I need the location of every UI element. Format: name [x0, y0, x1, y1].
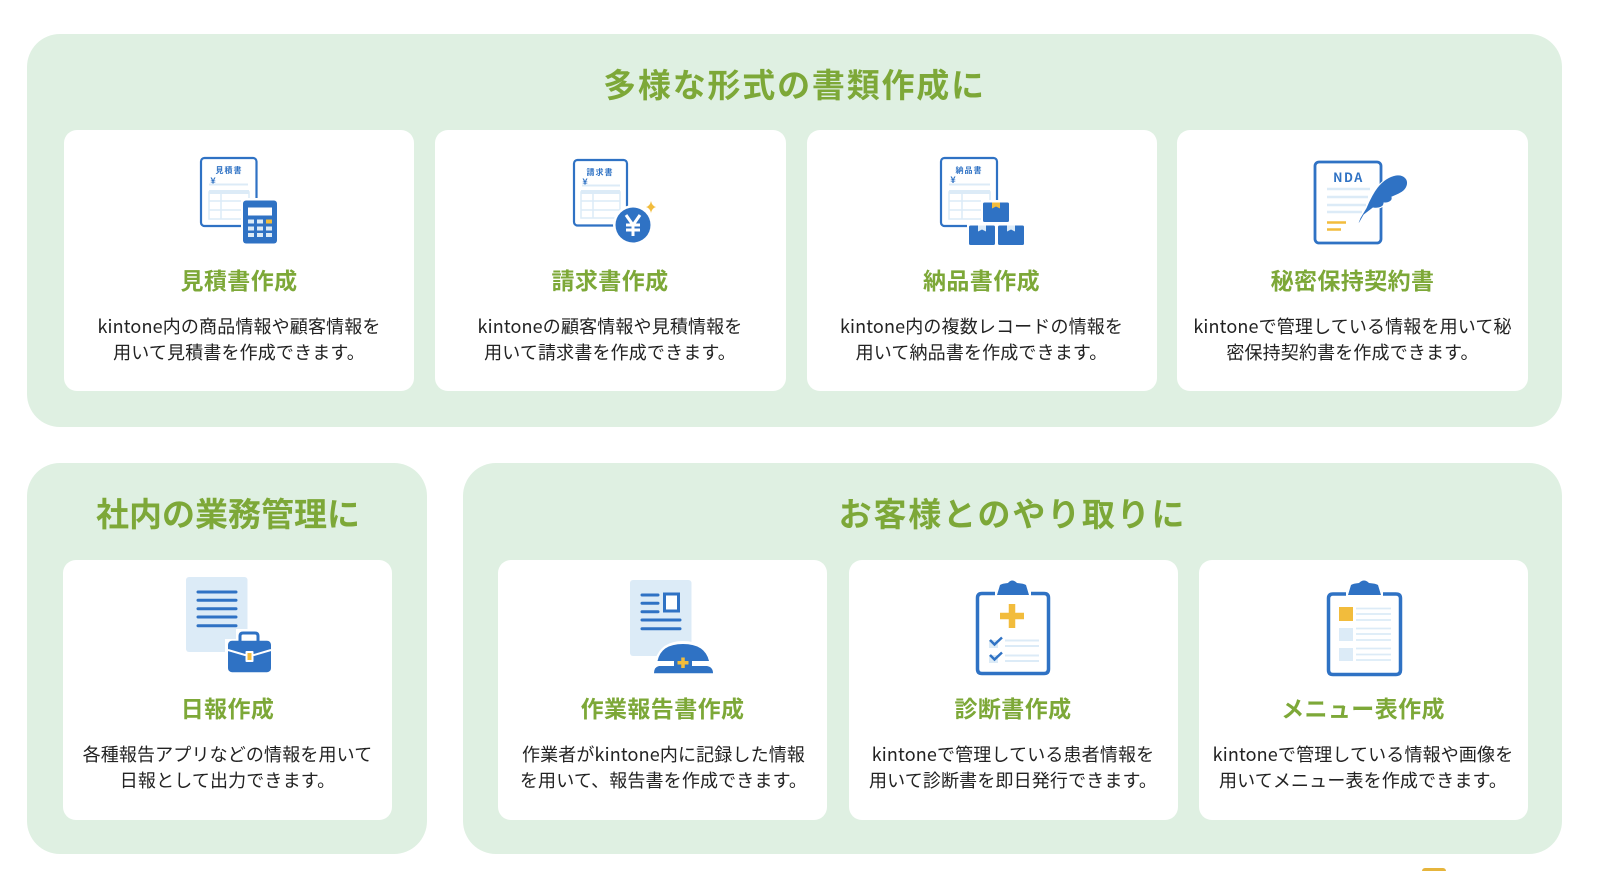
description: work report — [520, 740, 807, 792]
icon: NDA with quill: NDA — [1333, 167, 1364, 186]
card title: invoice: 請求書作成 — [552, 262, 668, 296]
description: invoice — [478, 312, 742, 365]
description: daily report — [83, 740, 372, 792]
icon: clipboard with cross — [976, 580, 1050, 676]
description: daily report: 各種報告アプリなどの情報を用いて — [83, 740, 372, 766]
panel: internal operations — [27, 463, 427, 854]
description: NDA: kintoneで管理している情報を用いて秘 — [1193, 312, 1512, 338]
description: delivery note: kintone内の複数レコードの情報を — [840, 312, 1123, 338]
description: quotation: kintone内の商品情報や顧客情報を — [97, 312, 381, 338]
cropped yellow shape at bottom edge — [1422, 868, 1446, 871]
card: invoice — [434, 130, 786, 391]
panel: document creation — [27, 34, 1562, 427]
icon: NDA with quill — [1314, 160, 1408, 244]
icon: invoice with yen coin: ¥ — [582, 175, 588, 188]
icon: quotation with calculator: 見積書 — [216, 165, 242, 176]
icon: clipboard with menu list — [1326, 580, 1402, 676]
card title: medical certificate: 診断書作成 — [954, 690, 1072, 724]
card title: NDA: 秘密保持契約書 — [1271, 262, 1434, 296]
icon: quotation with calculator: ¥ — [210, 174, 216, 187]
description: invoice: 用いて請求書を作成できます。 — [484, 339, 736, 365]
card: work report — [498, 560, 827, 820]
icon: delivery note with boxes: ¥ — [950, 173, 956, 186]
card title: daily report: 日報作成 — [181, 690, 274, 724]
description: delivery note — [840, 312, 1123, 365]
card: NDA — [1177, 130, 1528, 391]
description: medical certificate: 用いて診断書を即日発行できます。 — [869, 766, 1157, 792]
description: invoice: kintoneの顧客情報や見積情報を — [478, 312, 742, 338]
panel: customer interactions — [463, 463, 1562, 854]
description: quotation: 用いて見積書を作成できます。 — [113, 339, 365, 365]
description: NDA: 密保持契約書を作成できます。 — [1226, 339, 1479, 365]
card: menu — [1198, 560, 1528, 820]
card: medical certificate — [848, 560, 1178, 820]
description: quotation — [97, 312, 381, 365]
description: work report: 作業者がkintone内に記録した情報 — [522, 740, 805, 766]
card: delivery note — [806, 130, 1156, 391]
card: quotation — [64, 130, 414, 391]
icon: report with helmet — [630, 580, 713, 674]
heading: document creation: 多様な形式の書類作成に — [603, 59, 986, 107]
card title: menu: メニュー表作成 — [1281, 690, 1445, 724]
description: NDA — [1193, 312, 1512, 365]
icon: delivery note with boxes: 納品書 — [956, 165, 982, 176]
description: daily report: 日報として出力できます。 — [120, 766, 335, 792]
card title: delivery note: 納品書作成 — [923, 262, 1040, 296]
icon: invoice with yen coin — [572, 158, 656, 242]
card title: quotation: 見積書作成 — [180, 262, 298, 296]
description: menu: kintoneで管理している情報や画像を — [1213, 740, 1513, 766]
description: medical certificate: kintoneで管理している患者情報を — [872, 740, 1154, 766]
card title: work report: 作業報告書作成 — [581, 690, 744, 724]
card: daily report — [63, 560, 392, 820]
icon: quotation with calculator — [200, 156, 277, 244]
icon: invoice with yen coin: 請求書 — [586, 167, 614, 178]
icon: report with briefcase — [186, 577, 271, 672]
heading: customer interactions: お客様とのやり取りに — [839, 488, 1186, 536]
description: work report: を用いて、報告書を作成できます。 — [520, 766, 807, 792]
description: menu — [1213, 740, 1513, 792]
description: menu: 用いてメニュー表を作成できます。 — [1219, 766, 1507, 792]
icon: delivery note with boxes — [940, 156, 1024, 245]
heading: internal operations: 社内の業務管理に — [96, 488, 360, 536]
description: medical certificate — [869, 740, 1157, 792]
description: delivery note: 用いて納品書を作成できます。 — [856, 339, 1107, 365]
